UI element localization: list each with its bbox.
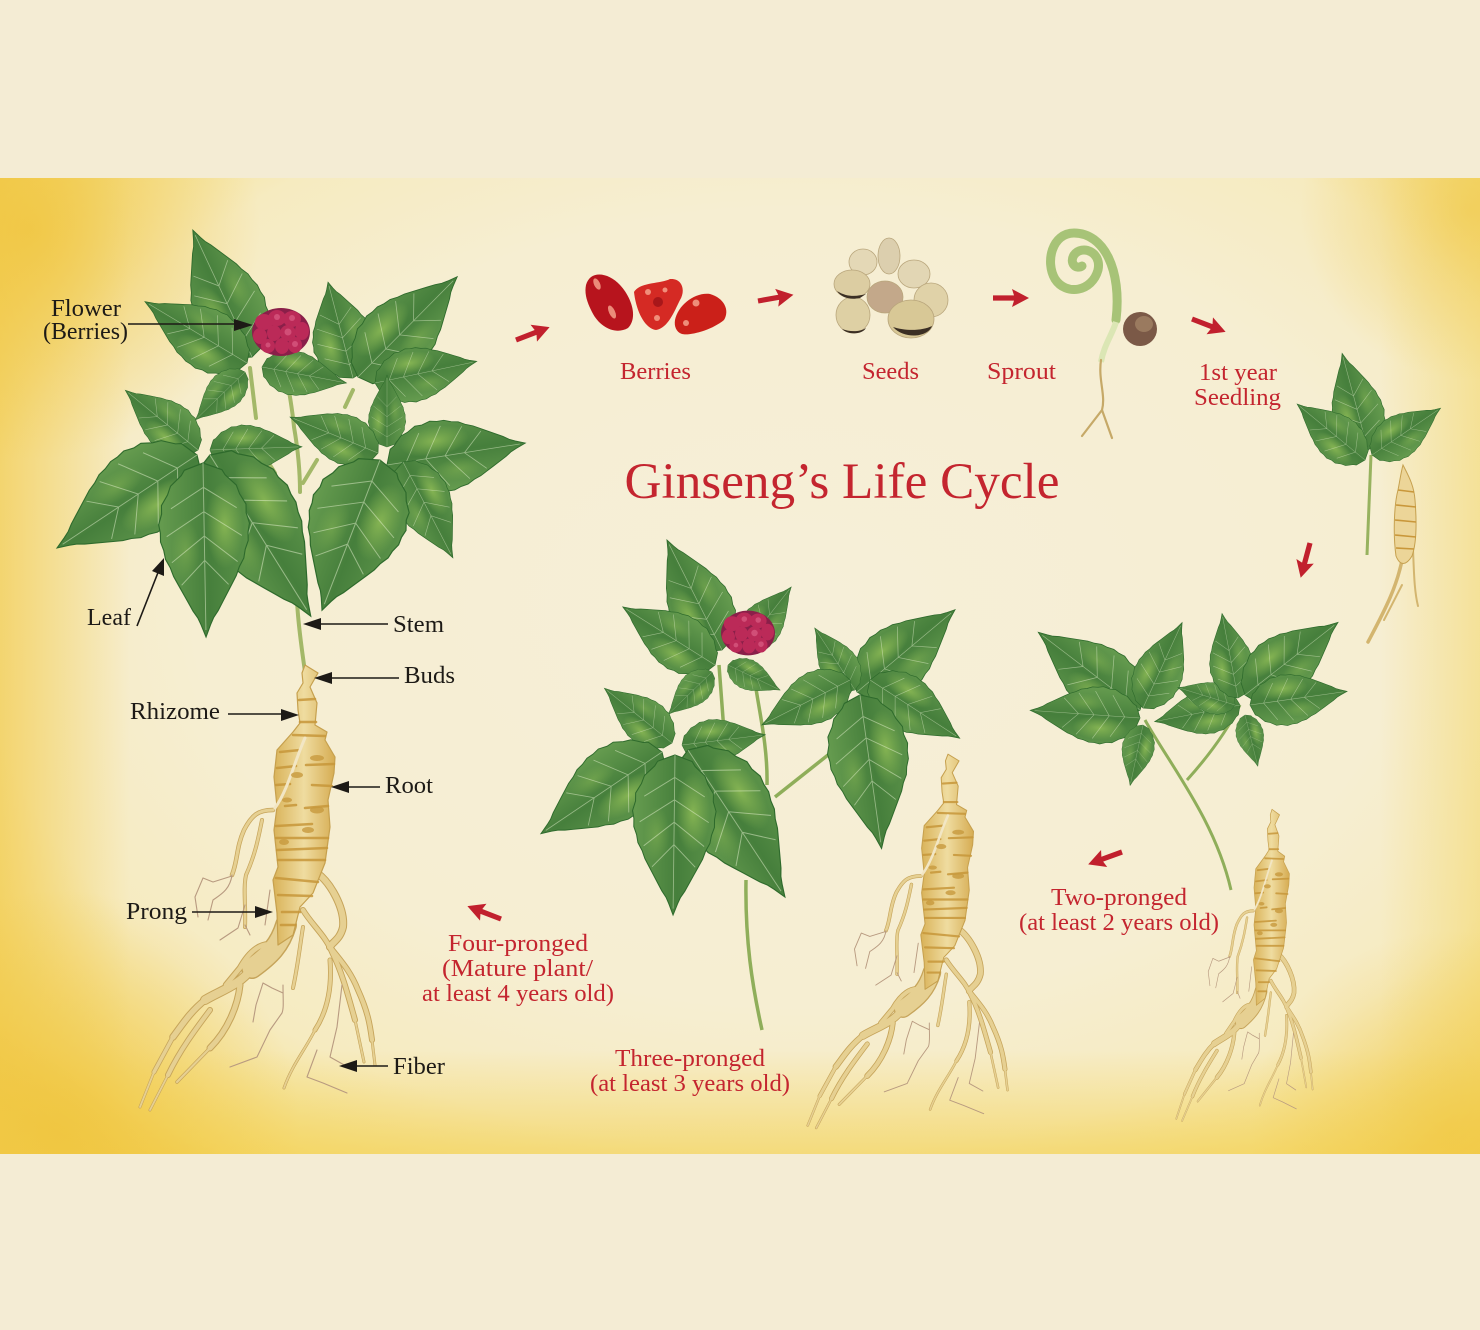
callout: rhizome: [228, 709, 299, 721]
callout: stem: [303, 618, 388, 630]
label: stem: Stem: [393, 612, 444, 638]
leaves: [1282, 347, 1453, 478]
arrow 5: [1292, 541, 1319, 580]
ginseng root: [808, 754, 1008, 1128]
label: sprout: Sprout: [987, 359, 1056, 385]
label: leaf: Leaf: [87, 605, 131, 631]
mature plant diagram: [33, 215, 531, 1110]
label: seeds: Seeds: [862, 359, 919, 385]
two-pronged plant: [1018, 598, 1357, 1121]
flower berries: [252, 308, 310, 356]
label: berries: Berries: [620, 359, 691, 385]
leaves: [33, 215, 531, 642]
label: seedling: 1st year: [1199, 360, 1277, 386]
label: four-pronged: at least 4 years old): [422, 981, 614, 1007]
label: flower: (Berries): [43, 319, 128, 345]
stems: [719, 660, 828, 1030]
label: seedling: [1194, 360, 1281, 411]
parchment panel: [0, 178, 1480, 1154]
label: buds: Buds: [404, 663, 455, 689]
label: fiber: Fiber: [393, 1054, 445, 1080]
icon: seeds: [834, 238, 948, 338]
stems: [1145, 705, 1240, 890]
arrow 4: [1189, 311, 1229, 340]
label: flower: Flower: [51, 296, 121, 322]
label: rhizome: Rhizome: [130, 699, 220, 725]
callout: leaf: [137, 558, 164, 626]
title: Ginseng’s Life Cycle: [624, 454, 1060, 510]
seedling: [1282, 347, 1453, 642]
label: four-pronged: (Mature plant/: [442, 956, 593, 982]
label: prong: Prong: [126, 899, 187, 925]
icon: berries: [585, 274, 726, 334]
part labels: [43, 296, 455, 1080]
label: two-pronged: [1019, 885, 1219, 936]
label: seedling: Seedling: [1194, 385, 1281, 411]
leaves: [520, 526, 977, 922]
arrow 1: [513, 319, 553, 348]
label: four-pronged: [422, 931, 614, 1007]
callout: flower: [128, 319, 253, 331]
label: three-pronged: Three-pronged: [615, 1046, 765, 1072]
arrow 6: [1085, 844, 1125, 873]
flower berries: [721, 611, 775, 655]
label: two-pronged: Two-pronged: [1051, 885, 1187, 911]
ginseng root: [140, 665, 375, 1110]
stem: [1367, 455, 1371, 555]
callout: fiber: [339, 1060, 388, 1072]
label: four-pronged: Four-pronged: [448, 931, 588, 957]
stage labels: [422, 359, 1281, 1097]
label: three-pronged: (at least 3 years old): [590, 1071, 790, 1097]
leaves: [1018, 598, 1357, 789]
icon: sprout: [1051, 233, 1157, 438]
callout: prong: [192, 906, 273, 918]
label: flower: [43, 296, 128, 345]
cycle arrows: [464, 286, 1319, 927]
root: [1368, 465, 1418, 642]
callout: buds: [314, 672, 399, 684]
label: two-pronged: (at least 2 years old): [1019, 910, 1219, 936]
arrow 2: [756, 286, 795, 310]
ginseng root: [1176, 809, 1313, 1121]
stems: [250, 357, 353, 672]
callouts: [128, 319, 399, 1072]
callout: root: [331, 781, 380, 793]
three-pronged plant: [520, 526, 1008, 1128]
arrow 3: [993, 289, 1029, 307]
arrow 7: [464, 898, 504, 927]
label: three-pronged: [590, 1046, 790, 1097]
label: root: Root: [385, 773, 433, 799]
